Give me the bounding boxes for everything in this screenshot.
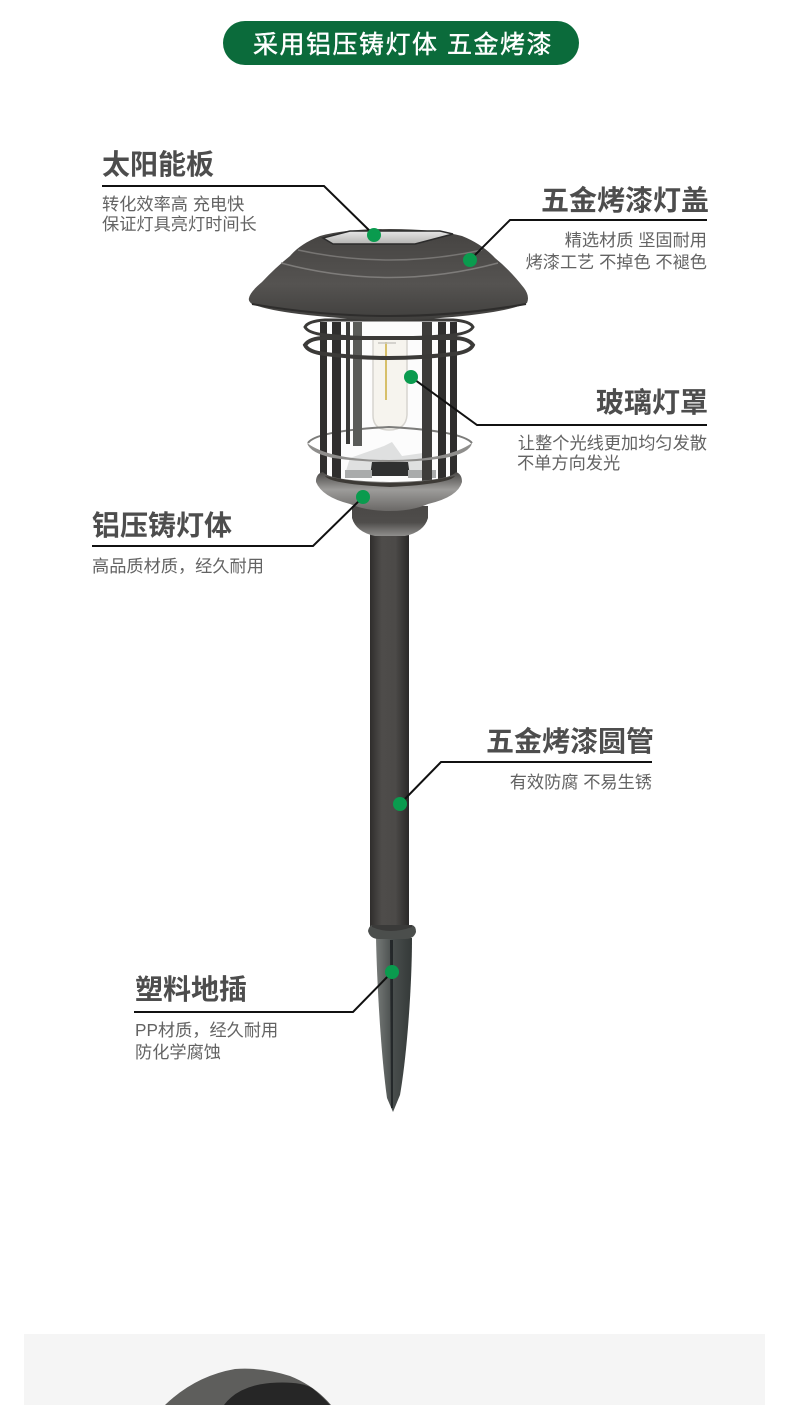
callout: painted lamp cap: 烤漆工艺 不掉色 不褪色 [526, 252, 707, 272]
solar lamp product [249, 229, 528, 1112]
callout: painted pipe: 有效防腐 不易生锈 [510, 772, 652, 792]
callout: glass shade: 不单方向发光 [517, 453, 620, 473]
callout: plastic spike: 防化学腐蚀 [135, 1042, 221, 1062]
callout: glass shade [404, 370, 708, 473]
title pill: 采用铝压铸灯体 五金烤漆 [253, 31, 553, 59]
callout: glass shade: 让整个光线更加均匀发散 [518, 433, 707, 453]
callout: painted pipe [393, 726, 654, 811]
lamp pipe [370, 530, 409, 935]
solar panel [323, 231, 453, 244]
callout: painted lamp cap [463, 185, 709, 272]
callout: glass shade: 玻璃灯罩 [596, 387, 708, 418]
callout: die-cast body: 铝压铸灯体 [92, 510, 232, 541]
callout: die-cast body [92, 490, 370, 576]
metal cage [305, 320, 473, 486]
next panel: cropped product photo [24, 1334, 765, 1405]
callout: solar panel: 保证灯具亮灯时间长 [102, 214, 257, 234]
callout: plastic spike [134, 965, 399, 1062]
callout: solar panel: 转化效率高 充电快 [102, 194, 244, 214]
callout: plastic spike: 塑料地插 [135, 974, 247, 1005]
lower ring back edge [308, 427, 472, 443]
glass shade and bulb [326, 322, 454, 480]
lamp neck and base [316, 472, 462, 536]
callout: die-cast body: 高品质材质，经久耐用 [92, 556, 264, 576]
callout: solar panel: 太阳能板 [102, 149, 214, 180]
callout: plastic spike: PP材质，经久耐用 [135, 1020, 278, 1040]
callout: painted lamp cap: 五金烤漆灯盖 [541, 185, 709, 216]
callout: painted lamp cap: 精选材质 坚固耐用 [565, 230, 707, 250]
title pill [223, 21, 579, 65]
cap [249, 229, 528, 321]
callout: solar panel [102, 149, 381, 242]
plastic ground spike [368, 925, 416, 1112]
callout: painted pipe: 五金烤漆圆管 [486, 726, 654, 757]
